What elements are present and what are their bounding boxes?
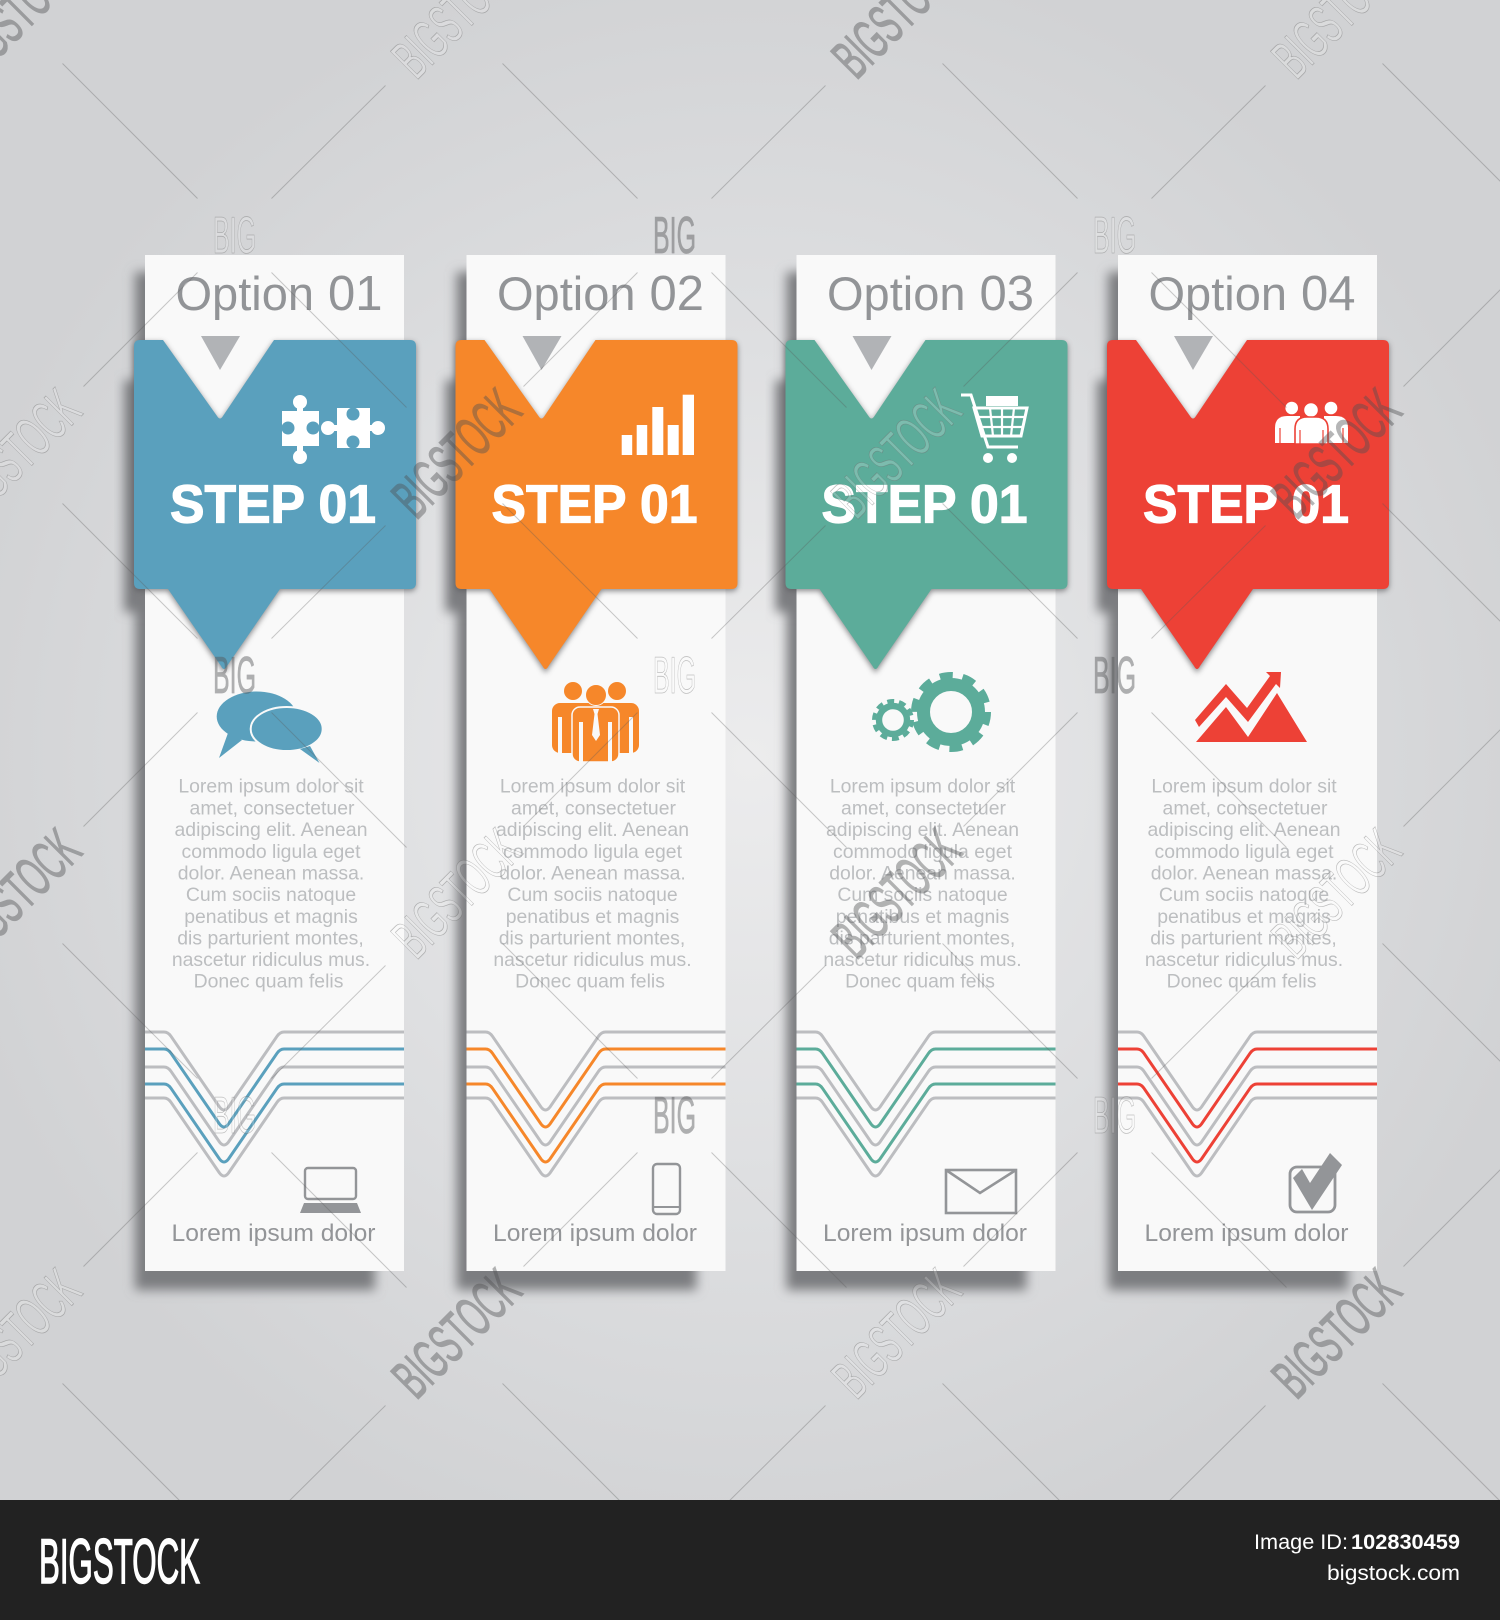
icon: bar chart bbox=[622, 395, 694, 455]
site url: bigstock.com bbox=[1327, 1562, 1460, 1585]
panel: option 03: Cum sociis natoque bbox=[837, 884, 1008, 906]
panel: option 02: dolor. Aenean massa. bbox=[499, 862, 686, 884]
panel: option 04: STEP 01 bbox=[1143, 476, 1349, 534]
watermark: BIGSTOCK marks: BIGSTOCK bbox=[380, 1257, 533, 1410]
coloured header bbox=[134, 340, 416, 669]
body text: Cum sociis natoque bbox=[186, 884, 356, 906]
text: BIG bbox=[1093, 1087, 1136, 1145]
panel: option 02: Lorem ipsum dolor bbox=[493, 1220, 697, 1247]
notch triangle bbox=[201, 336, 240, 370]
icon: mountain with rising arrow bbox=[1195, 672, 1307, 742]
icon: phone bbox=[653, 1164, 680, 1214]
panel: option 02: amet, consectetuer bbox=[511, 797, 676, 819]
panel: option 03: nascetur ridiculus mus. bbox=[823, 949, 1022, 971]
body text: dolor. Aenean massa. bbox=[178, 862, 364, 884]
panel: option 02: STEP 01 bbox=[492, 476, 698, 534]
panel: option 04 bbox=[1097, 255, 1389, 1290]
panel: option 04: Donec quam felis bbox=[1167, 971, 1316, 993]
panel: option 02: Cum sociis natoque bbox=[507, 884, 678, 906]
watermark: BIG marks: BIG bbox=[653, 647, 696, 705]
icon: laptop bbox=[300, 1168, 361, 1213]
icon: puzzle bbox=[282, 395, 385, 464]
panel: option 04: dis parturient montes, bbox=[1150, 928, 1337, 950]
panel: option 04: Option bbox=[1148, 267, 1287, 320]
watermark: BIG marks bbox=[213, 207, 1136, 1145]
panel: option 04: 04 bbox=[1301, 267, 1356, 321]
body text: nascetur ridiculus mus. bbox=[172, 949, 370, 971]
panel: option 03: penatibus et magnis bbox=[836, 906, 1009, 928]
panel: option 04: Lorem ipsum dolor bbox=[1144, 1220, 1348, 1247]
panel: option 02: commodo ligula eget bbox=[503, 841, 683, 863]
body text: dis parturient montes, bbox=[177, 928, 364, 950]
panel: option 03: 03 bbox=[980, 267, 1034, 321]
watermark: BIG marks: BIG bbox=[653, 207, 696, 265]
icon: checkbox bbox=[1290, 1153, 1342, 1212]
watermark: BIG marks: BIG bbox=[653, 1087, 696, 1145]
text: BIG bbox=[1093, 647, 1136, 705]
text: BIG bbox=[1093, 207, 1136, 265]
wave lines bbox=[145, 1032, 404, 1176]
watermark: BIGSTOCK marks: BIGSTOCK bbox=[820, 1257, 973, 1410]
body text: penatibus et magnis bbox=[184, 906, 358, 928]
panel: option 03: dis parturient montes, bbox=[829, 928, 1015, 950]
body text: Donec quam felis bbox=[194, 971, 343, 993]
panel: option 04: Cum sociis natoque bbox=[1159, 884, 1329, 906]
panel: option 04: nascetur ridiculus mus. bbox=[1145, 949, 1343, 971]
panel: option 03: amet, consectetuer bbox=[841, 797, 1006, 819]
body text: amet, consectetuer bbox=[190, 797, 355, 819]
panel: option 02: dis parturient montes, bbox=[499, 928, 685, 950]
panel: option 03 bbox=[776, 255, 1068, 1290]
panel: option 03: dolor. Aenean massa. bbox=[829, 862, 1016, 884]
panel: option 03: commodo ligula eget bbox=[833, 841, 1013, 863]
panel: option 01 bbox=[124, 255, 416, 1290]
step label: STEP 01 bbox=[170, 476, 376, 534]
panel: option 04: amet, consectetuer bbox=[1163, 797, 1328, 819]
icon: white team bbox=[1275, 402, 1348, 444]
icon: team in suits bbox=[552, 682, 639, 762]
panel: option 04: dolor. Aenean massa. bbox=[1151, 862, 1337, 884]
body text: adipiscing elit. Aenean bbox=[175, 819, 367, 841]
footer bar bbox=[0, 1500, 1500, 1620]
body text: commodo ligula eget bbox=[182, 841, 361, 863]
panel: option 02: adipiscing elit. Aenean bbox=[496, 819, 689, 841]
panel: option 04: Lorem ipsum dolor sit bbox=[1151, 776, 1337, 798]
panel: option 03: adipiscing elit. Aenean bbox=[826, 819, 1019, 841]
icon: gears bbox=[874, 676, 988, 748]
panel: option 02: penatibus et magnis bbox=[506, 906, 679, 928]
panel: option 03: Donec quam felis bbox=[845, 971, 995, 993]
panel: option 02: 02 bbox=[650, 267, 704, 321]
image id number: 102830459 bbox=[1351, 1531, 1460, 1554]
panel: option 02: Option bbox=[497, 267, 635, 320]
body text bbox=[172, 776, 370, 993]
panel: option 02 bbox=[446, 255, 738, 1290]
icon: envelope bbox=[946, 1170, 1016, 1213]
option heading: 01 bbox=[328, 267, 383, 321]
watermark: BIG marks: BIG bbox=[213, 207, 256, 265]
panel: option 03: Option bbox=[827, 267, 965, 320]
footer label: Lorem ipsum dolor bbox=[172, 1220, 376, 1247]
watermark: BIG marks: BIG bbox=[213, 647, 256, 705]
panel: option 02: Lorem ipsum dolor sit bbox=[500, 776, 686, 798]
watermark: BIGSTOCK marks: BIGSTOCK bbox=[380, 817, 533, 970]
image id label: Image ID: bbox=[1254, 1531, 1348, 1554]
panel: option 04: commodo ligula eget bbox=[1155, 841, 1334, 863]
panel: option 03: Lorem ipsum dolor bbox=[823, 1220, 1027, 1247]
watermark: BIGSTOCK marks: BIGSTOCK bbox=[380, 377, 533, 530]
icon: chat bubbles bbox=[217, 692, 323, 763]
watermark: BIG marks: BIG bbox=[213, 1087, 256, 1145]
watermark: BIGSTOCK marks: BIGSTOCK bbox=[820, 377, 973, 530]
body text: Lorem ipsum dolor sit bbox=[178, 776, 364, 798]
option heading: Option bbox=[176, 267, 314, 320]
icon: shopping cart bbox=[961, 395, 1027, 463]
panel: option 03: Lorem ipsum dolor sit bbox=[830, 776, 1016, 798]
watermark: BIGSTOCK marks: BIGSTOCK bbox=[820, 817, 973, 970]
panel: option 02: nascetur ridiculus mus. bbox=[493, 949, 692, 971]
panel: option 03: STEP 01 bbox=[822, 476, 1028, 534]
panel: option 04: adipiscing elit. Aenean bbox=[1148, 819, 1340, 841]
panel: option 02: Donec quam felis bbox=[515, 971, 665, 993]
panel: option 04: penatibus et magnis bbox=[1157, 906, 1331, 928]
footer bar: BIGSTOCK bbox=[39, 1527, 200, 1597]
